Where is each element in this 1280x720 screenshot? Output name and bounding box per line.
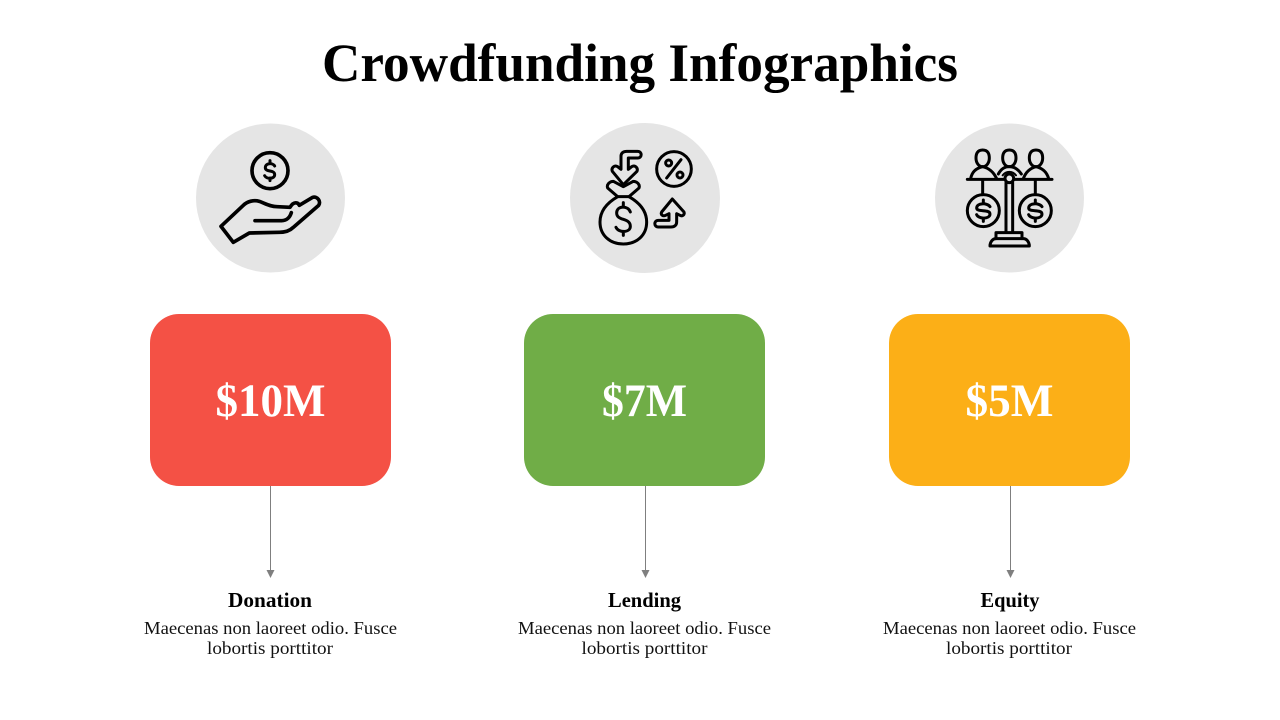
title: Crowdfunding Infographics <box>322 33 958 93</box>
text block: donation: Donation <box>228 588 312 612</box>
panel: equity <box>883 124 1136 658</box>
value card: $7M: $7M <box>602 375 687 427</box>
text block: equity <box>883 588 1136 658</box>
value card: $7M <box>524 314 765 486</box>
value card: $10M <box>150 314 391 486</box>
text block: equity: lobortis porttitor <box>946 638 1072 658</box>
text block: donation: Maecenas non laoreet odio. Fusce <box>144 618 397 638</box>
text block: equity: Maecenas non laoreet odio. Fusce <box>883 618 1136 638</box>
text block: lending: Lending <box>608 588 681 612</box>
icon circle: lending <box>570 123 720 273</box>
value card: $5M: $5M <box>966 375 1054 427</box>
icon: investors on balance scale <box>967 150 1052 246</box>
text block: donation: lobortis porttitor <box>207 638 333 658</box>
icon circle: donation <box>196 124 345 272</box>
icon circle: equity <box>935 124 1084 272</box>
text block: lending <box>518 588 771 658</box>
icon: money bag with percent and arrows <box>600 151 691 244</box>
value card: $10M: $10M <box>216 375 326 427</box>
arrow: equity <box>1006 486 1014 578</box>
text block: donation <box>144 588 397 658</box>
text block: equity: Equity <box>980 588 1040 612</box>
value card: $5M <box>889 314 1130 486</box>
panel: donation <box>144 124 397 658</box>
arrow: lending <box>642 486 650 578</box>
panel: lending <box>518 123 771 658</box>
icon: hand holding coin <box>221 153 320 242</box>
text block: lending: Maecenas non laoreet odio. Fusce <box>518 618 771 638</box>
text block: lending: lobortis porttitor <box>582 638 708 658</box>
arrow: donation <box>266 486 274 578</box>
